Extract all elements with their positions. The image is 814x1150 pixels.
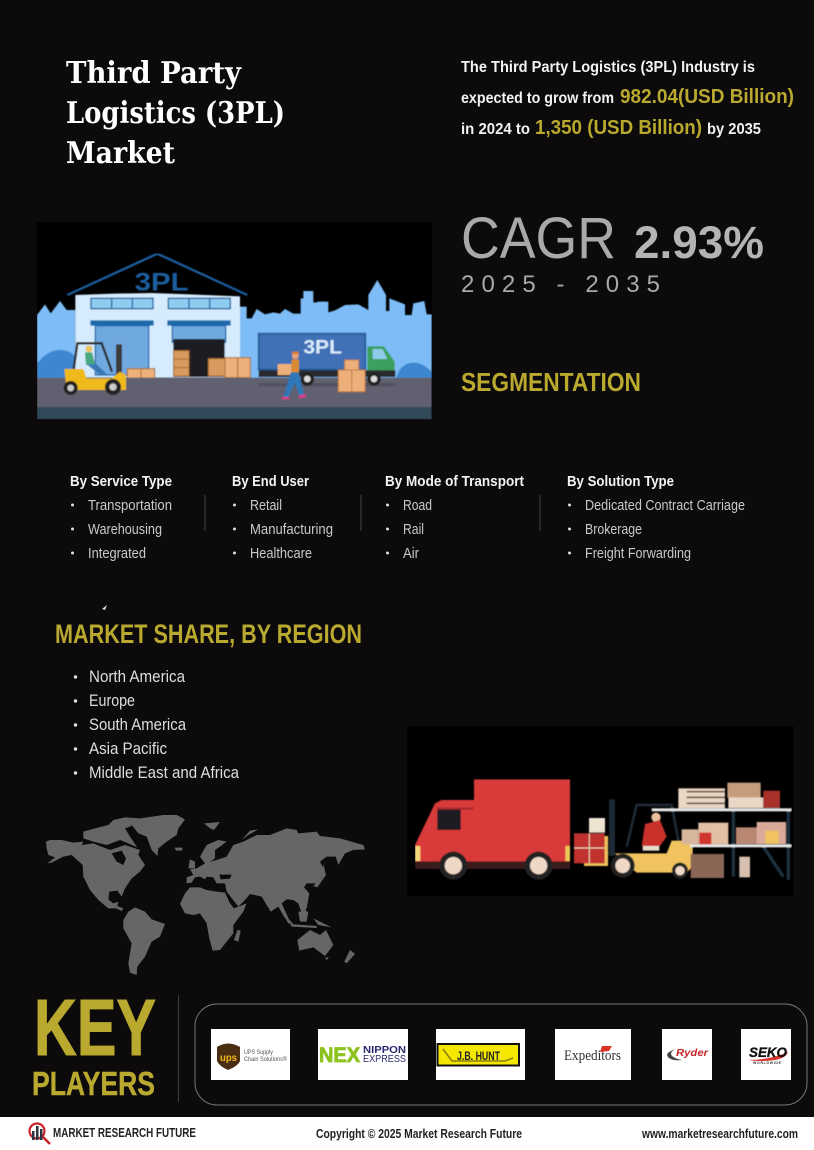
illustration: 3PL warehouse: 3PL [135, 268, 189, 296]
logo: UPS [211, 1029, 290, 1080]
market size summary [461, 59, 794, 139]
market size summary: expected to grow from [461, 90, 614, 107]
logo: SEKO: SEKO [749, 1044, 787, 1060]
segment: by end user: Manufacturing [250, 522, 333, 538]
title [66, 56, 285, 171]
segment: by solution type: Dedicated Contract Carriage [585, 498, 745, 514]
greenland [132, 815, 185, 856]
tasmania [325, 957, 329, 960]
logo: Nippon Express [318, 1029, 408, 1080]
region list [74, 668, 240, 782]
segment: by solution type: By Solution Type [567, 473, 674, 490]
segment: by service type: Transportation [88, 498, 172, 514]
segment: by end user: Healthcare [250, 546, 312, 562]
region list: North America [89, 668, 186, 686]
logo: Nippon Express: EXPRESS [363, 1054, 406, 1065]
logo: SEKO [741, 1029, 791, 1080]
segment: by service type: Integrated [88, 546, 146, 562]
logo: Market Research Future [30, 1124, 50, 1144]
footer [0, 1117, 814, 1150]
segment: by mode of transport: By Mode of Transport [385, 473, 524, 490]
segmentation heading: SEGMENTATION [461, 367, 641, 397]
segment: by end user: By End User [232, 473, 309, 490]
market size summary: 1,350 (USD Billion) [535, 117, 702, 139]
market size summary: The Third Party Logistics (3PL) Industry is [461, 59, 755, 76]
logo: Nippon Express: NEX [319, 1044, 360, 1067]
logo: Nippon Express: NIPPON [363, 1045, 406, 1056]
market size summary: by 2035 [707, 121, 761, 138]
title: Logistics (3PL) [66, 96, 285, 131]
region list: Asia Pacific [89, 740, 167, 758]
segment: by end user [232, 473, 333, 562]
region list: South America [89, 716, 187, 734]
segment: by solution type: Freight Forwarding [585, 546, 691, 562]
logo: Ryder [662, 1029, 712, 1080]
segment: by mode of transport: Air [403, 546, 419, 562]
key players heading: KEY [34, 983, 156, 1072]
britain [188, 859, 195, 868]
segment: by mode of transport: Road [403, 498, 432, 514]
market share heading: MARKET SHARE, BY REGION [55, 619, 362, 649]
illustration: delivery truck and forklift [407, 726, 793, 896]
CAGR value: CAGR [461, 206, 616, 271]
logo: UPS: UPS Supply [244, 1050, 273, 1056]
title: Third Party [66, 56, 242, 91]
north america [46, 840, 145, 911]
market size summary: 982.04(USD Billion) [620, 86, 794, 108]
logo: Expeditors [555, 1029, 631, 1080]
segment: by solution type [567, 473, 745, 562]
region list: Middle East and Africa [89, 764, 240, 782]
logo: SEKO: WORLDWIDE [753, 1061, 782, 1065]
new zealand [344, 950, 355, 963]
segment: by end user: Retail [250, 498, 282, 514]
key players panel [195, 1004, 807, 1105]
key players heading [32, 983, 156, 1102]
australia [297, 930, 333, 956]
key players heading: PLAYERS [32, 1065, 155, 1102]
logo: J.B. Hunt: J.B. HUNT [457, 1049, 500, 1063]
CAGR value [461, 206, 764, 298]
segment: by service type: By Service Type [70, 473, 172, 490]
segment: by mode of transport [385, 473, 524, 562]
africa [180, 887, 247, 951]
segment: by solution type: Brokerage [585, 522, 642, 538]
hudson bay [112, 851, 126, 865]
footer: MARKET RESEARCH FUTURE [53, 1125, 196, 1140]
eurasia [187, 828, 365, 922]
world map [46, 815, 365, 975]
segment: by service type [70, 473, 172, 562]
black sea [219, 875, 232, 879]
CAGR value: 2025 - 2035 [461, 271, 660, 298]
novaya zemlya [242, 829, 258, 840]
logo: J.B. Hunt [436, 1029, 525, 1080]
logo: Expeditors: Expeditors [564, 1048, 621, 1064]
footer: Copyright © 2025 Market Research Future [316, 1126, 522, 1141]
madagascar [234, 930, 241, 942]
logo: UPS: Chain Solutions® [244, 1056, 288, 1063]
southeast asia islands [282, 902, 332, 928]
segment: by service type: Warehousing [88, 522, 162, 538]
region list: Europe [89, 692, 135, 710]
CAGR value: 2.93% [634, 217, 764, 268]
illustration: 3PL warehouse [37, 222, 432, 420]
canadian archipelago [83, 817, 140, 847]
logo: Ryder: Ryder [676, 1047, 709, 1059]
market size summary: in 2024 to [461, 121, 530, 138]
japan [313, 864, 326, 887]
segment: by mode of transport: Rail [403, 522, 424, 538]
svalbard [204, 822, 220, 830]
illustration: 3PL warehouse: 3PL [303, 338, 342, 359]
iceland [175, 848, 183, 851]
title: Market [66, 136, 175, 171]
logo: UPS: ups [220, 1053, 237, 1064]
south america [123, 907, 165, 975]
